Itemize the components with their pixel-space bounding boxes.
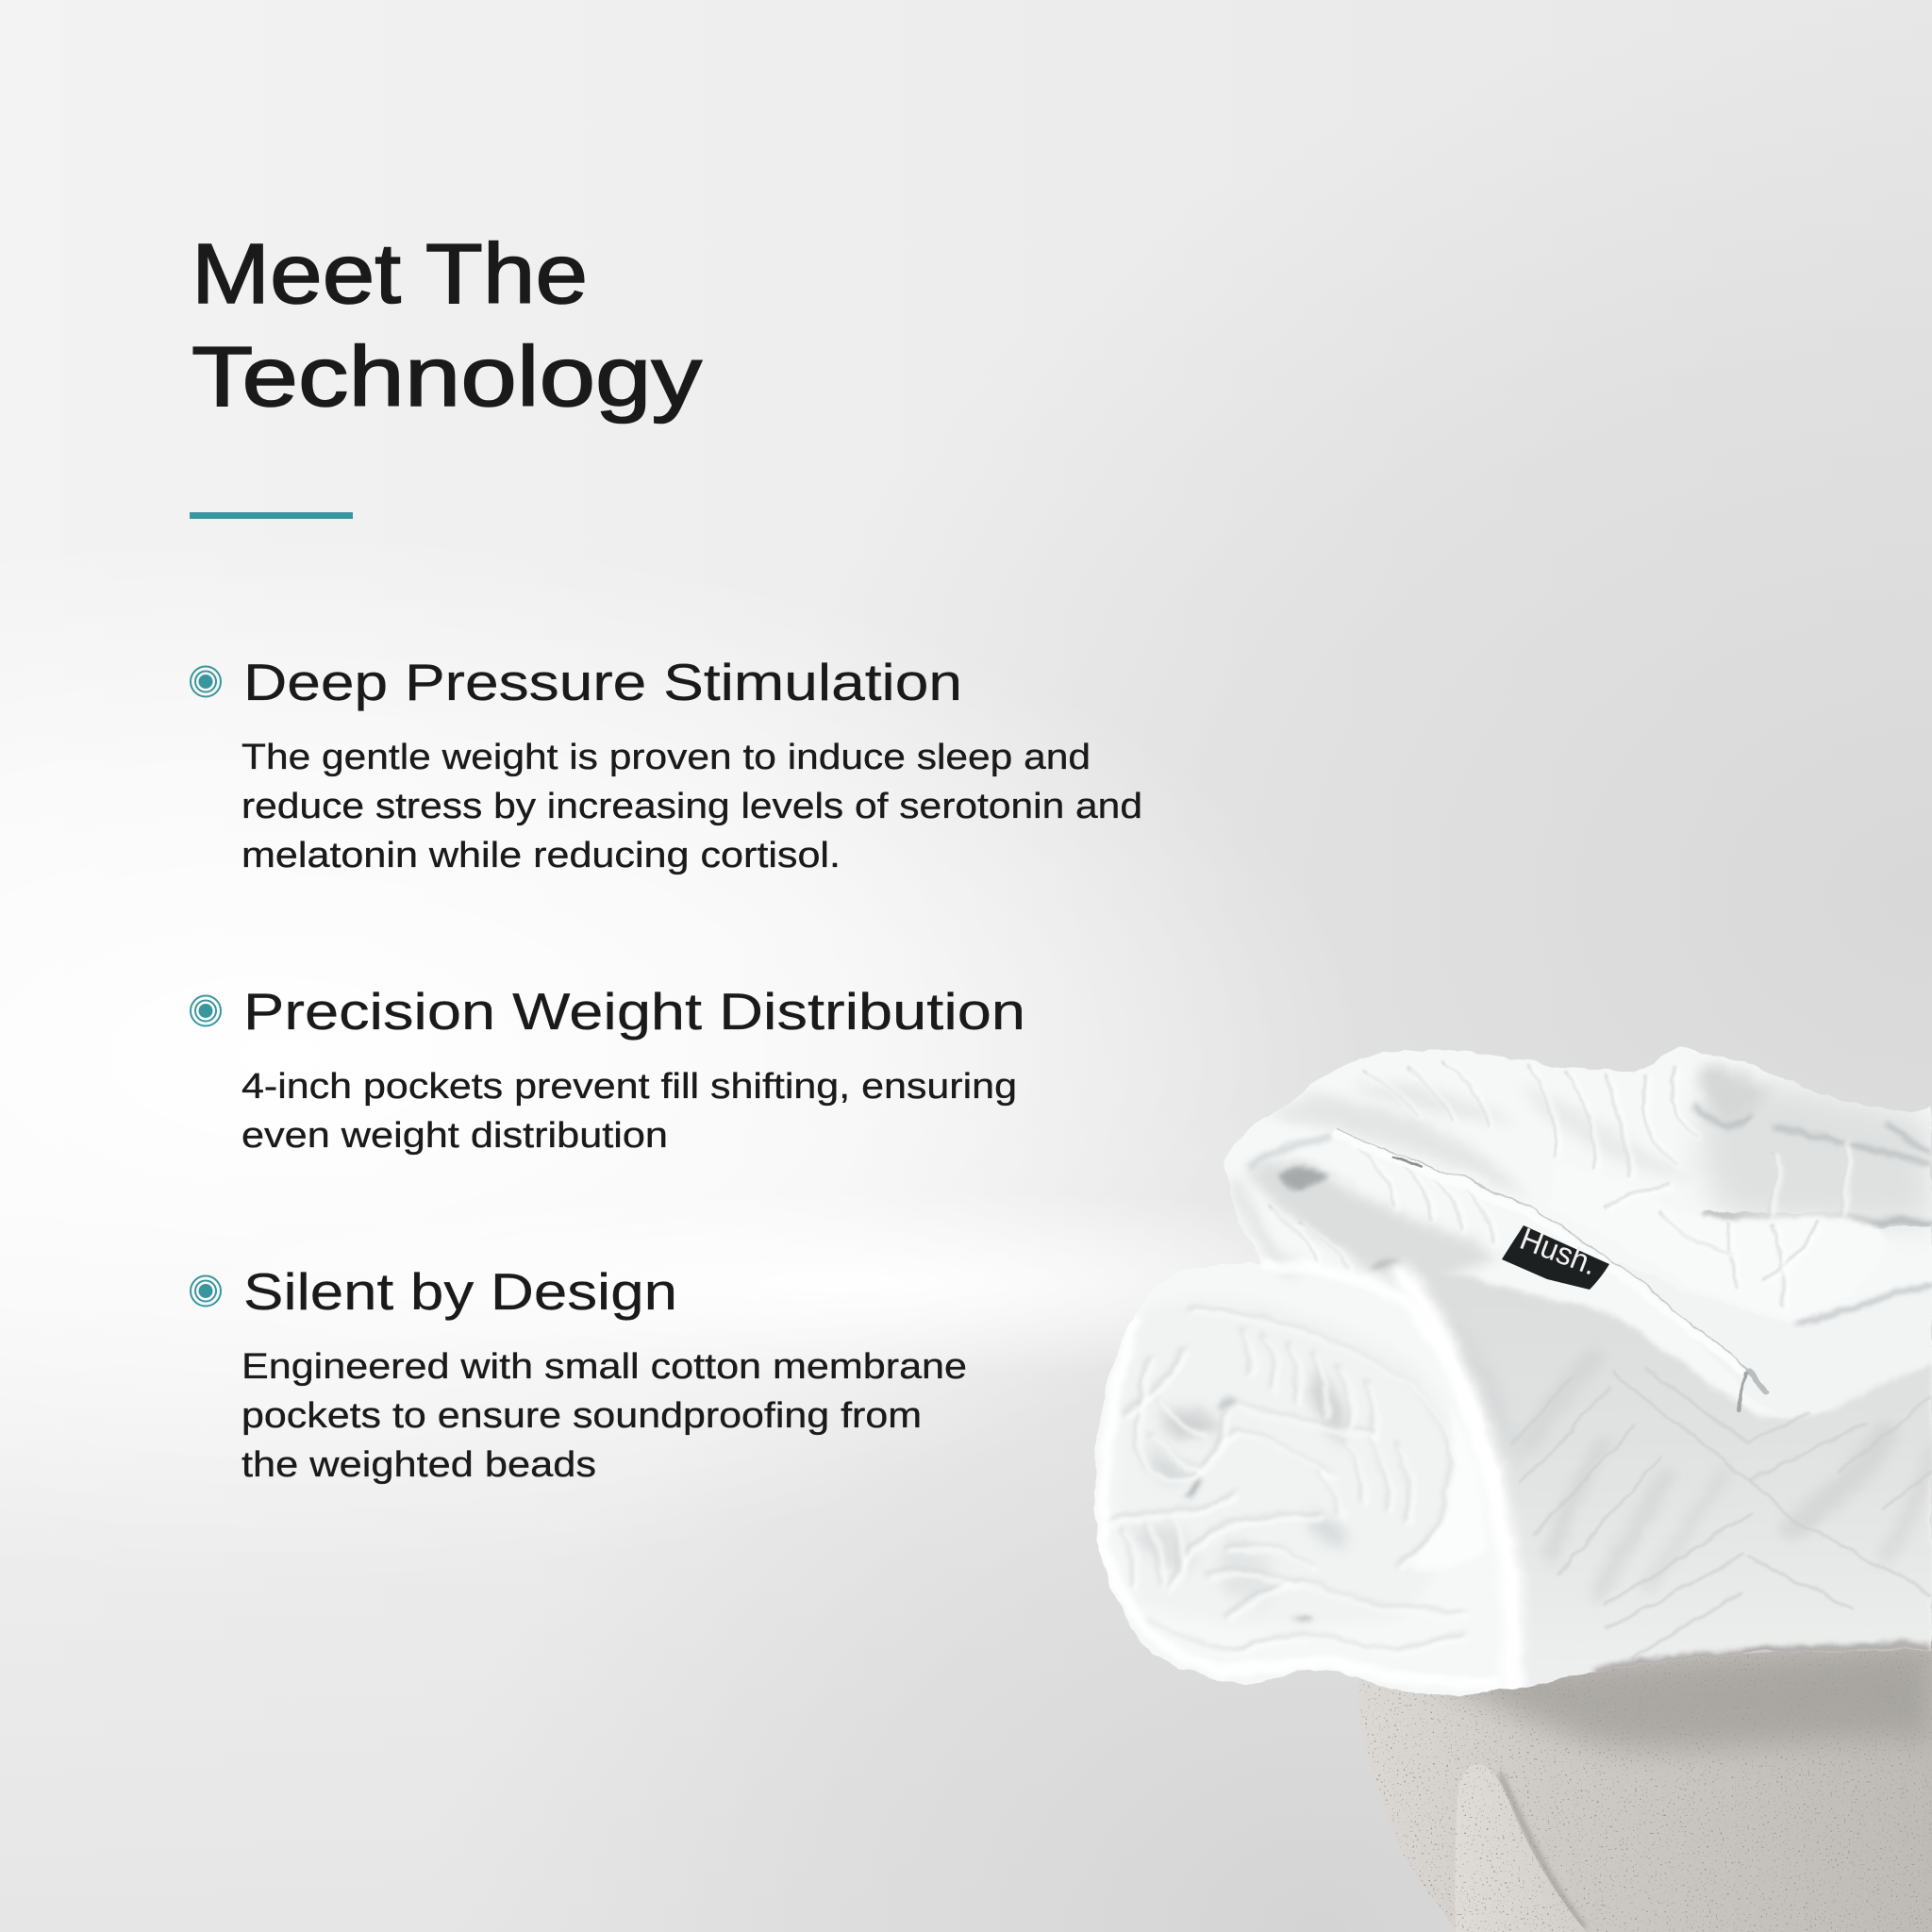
roll edge seam to stool <box>1594 1646 1932 1672</box>
description: the weighted beads <box>242 1445 596 1485</box>
roll smooth inner band <box>1417 1515 1453 1568</box>
deep notches <box>1184 1258 1401 1622</box>
product illustration: blanket on concrete stool <box>1085 1038 1932 1932</box>
lower zipped flap <box>1604 1255 1932 1413</box>
title: Meet The <box>192 227 588 322</box>
description: Engineered with small cotton membrane <box>242 1347 967 1387</box>
heading: Deep Pressure Stimulation <box>243 653 962 711</box>
description: pockets to ensure soundproofing from <box>242 1396 922 1436</box>
zipper seam <box>1337 1130 1747 1371</box>
front quilted panel <box>1394 1269 1932 1698</box>
feature: deep pressure stimulation <box>191 653 1142 875</box>
folded blanket <box>1085 1038 1932 1707</box>
feature: silent by design <box>191 1262 967 1485</box>
description <box>242 1347 967 1485</box>
description <box>242 738 1142 875</box>
description: reduce stress by increasing levels of serotonin and <box>242 787 1142 826</box>
feature: precision weight distribution <box>191 982 1025 1156</box>
top quilt ridges <box>1269 1061 1845 1307</box>
title: Technology <box>192 330 702 425</box>
bullet icon <box>191 1275 221 1306</box>
title <box>192 227 702 425</box>
roll creases <box>1104 1308 1462 1651</box>
pillow flap <box>1700 1212 1881 1234</box>
heading: Precision Weight Distribution <box>243 982 1025 1041</box>
front panel wave shadows <box>1528 1358 1932 1594</box>
description <box>242 1067 1017 1156</box>
stool leg <box>1455 1764 1587 1932</box>
bullet icon <box>191 996 221 1026</box>
accent divider <box>190 512 353 519</box>
roll shadow patches <box>1135 1370 1349 1596</box>
heading: Silent by Design <box>243 1262 677 1321</box>
bullet icon <box>191 666 221 696</box>
description: even weight distribution <box>242 1116 668 1156</box>
concrete stool <box>1358 1641 1932 1932</box>
description: melatonin while reducing cortisol. <box>242 836 841 875</box>
roll end <box>1109 1258 1465 1651</box>
upper fold shading <box>1264 1064 1932 1226</box>
Hush brand tag: Hush. <box>1515 1221 1602 1282</box>
description: 4-inch pockets prevent fill shifting, ensuring <box>242 1067 1017 1107</box>
quilted stitching <box>1511 1368 1932 1660</box>
description: The gentle weight is proven to induce sleep and <box>242 738 1091 777</box>
hem highlight <box>1396 1269 1514 1693</box>
inner pocket of top fold <box>1234 1137 1500 1292</box>
zipper pull <box>1738 1370 1766 1412</box>
